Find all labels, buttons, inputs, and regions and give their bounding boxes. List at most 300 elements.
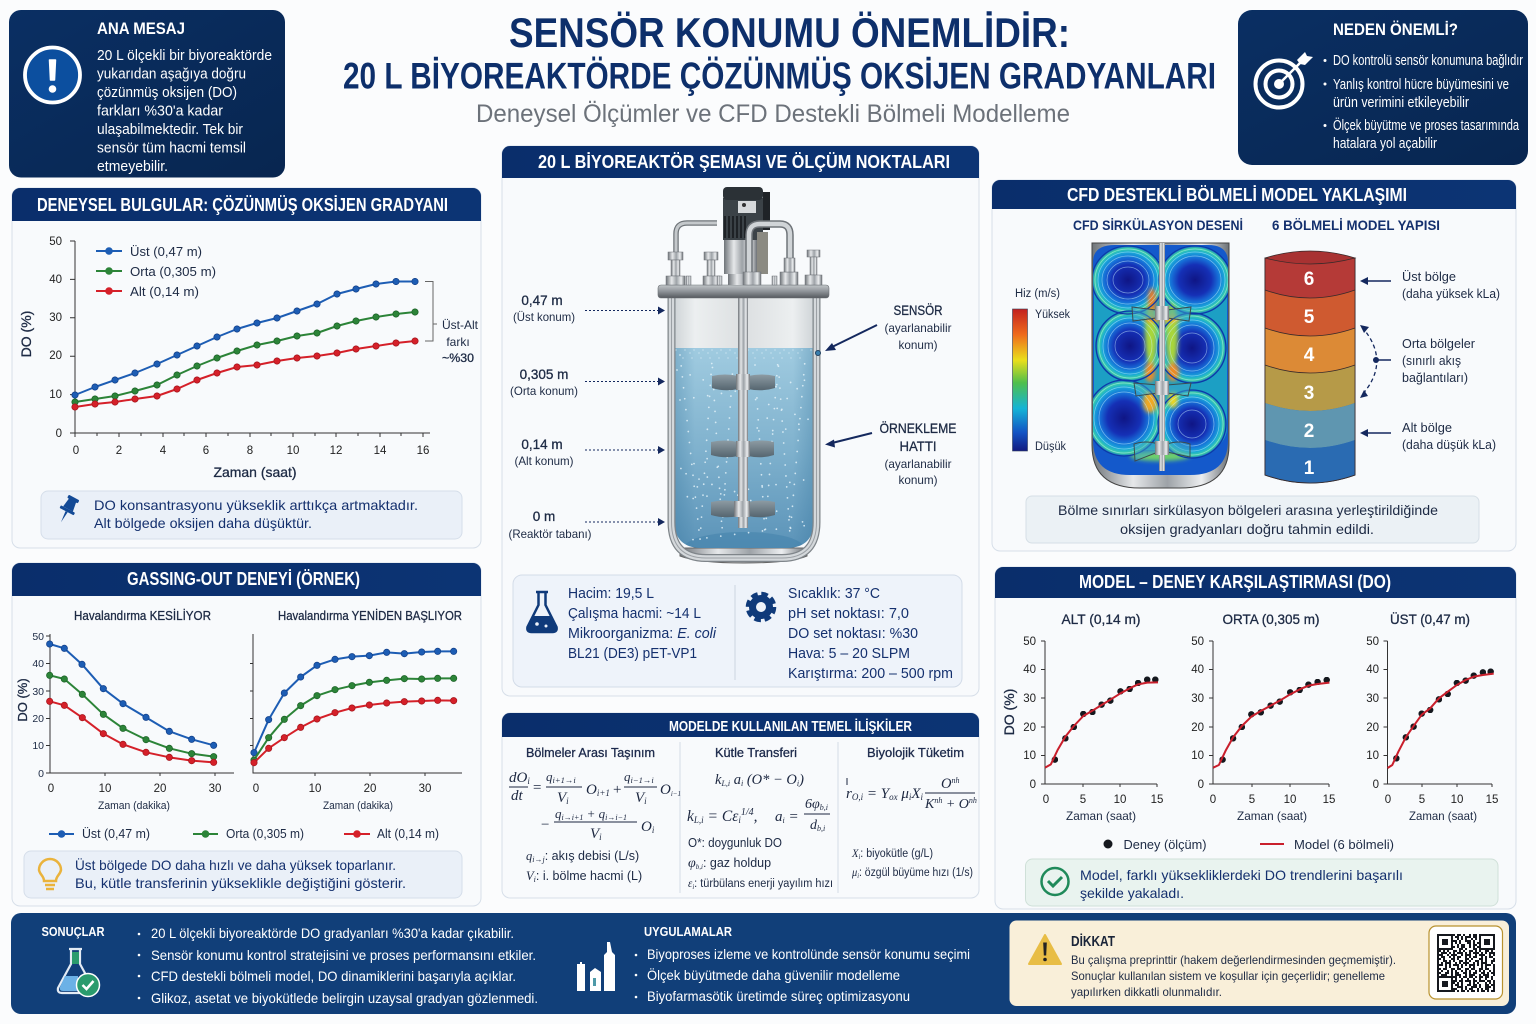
chart: orta: Zaman (saat) — [1237, 809, 1307, 823]
line chart: DO gradient: 8 — [247, 445, 253, 457]
formula: biyolojik tüketim: i — [921, 792, 924, 802]
formula: kütle transferi: b,i — [817, 824, 825, 833]
heading: model deney: MODEL – DENEY KARŞILAŞTIRMASI (DO) — [1079, 572, 1391, 592]
chart: üst: 0 — [1385, 794, 1391, 806]
label: örnekleme hattı: konum) — [898, 473, 938, 487]
legend: Orta (0,305 m) — [130, 264, 216, 279]
chart: orta: 40 — [1191, 664, 1204, 676]
panel: biyoreaktör şeması — [502, 146, 979, 696]
chart: alt: 50 — [1023, 636, 1036, 648]
section: uygulamalar: UYGULAMALAR — [644, 924, 733, 939]
bracket: üst-alt farkı: farkı — [446, 335, 470, 349]
bracket: üst-alt farkı: Üst-Alt — [442, 318, 479, 332]
line chart: DO gradient: 20 — [49, 350, 62, 362]
formula: kütle transferi: L,i — [693, 815, 704, 825]
panel: reaktör özellikleri: Sıcaklık: 37 °C — [788, 586, 880, 602]
label: sensör — [816, 301, 952, 356]
label: örnekleme hattı: (ayarlanabilir — [884, 457, 952, 471]
callout: model başarı — [1026, 859, 1498, 906]
chart: havalandırma kesiliyor: 50 — [32, 631, 44, 643]
formula: kütle transferi — [687, 746, 833, 891]
formula: kütle transferi: k — [687, 808, 694, 825]
legend: velocity scale: Yüksek — [1035, 309, 1070, 321]
impellers — [711, 374, 775, 517]
QR code — [1429, 926, 1502, 999]
formula: kütle transferi: k — [715, 772, 721, 788]
chart: üst: 30 — [1366, 693, 1379, 705]
panel: reaktör özellikleri: Mikroorganizma: E. coli — [568, 626, 717, 642]
formula: kütle transferi: L,i — [720, 779, 730, 788]
formula: biyolojik tüketim: i — [859, 853, 860, 861]
panel: reaktör özellikleri: DO set noktası: %30 — [788, 626, 918, 642]
motor — [723, 187, 770, 285]
chart: havalandırma kesiliyor: Havalandırma KESİLİYOR — [74, 608, 211, 623]
formula: bölmeler arası taşınım: V — [590, 826, 599, 842]
formula: bölmeler arası taşınım: V — [526, 869, 535, 883]
chart: alt: 20 — [1023, 722, 1036, 734]
chart: üst: Zaman (saat) — [1409, 809, 1477, 823]
annotation: alt bölge: (daha düşük kLa) — [1402, 438, 1496, 452]
line chart: DO gradient: 0 — [73, 445, 79, 457]
chart: havalandırma kesiliyor: 0 — [48, 783, 54, 795]
formula: biyolojik tüketim: O,i — [852, 792, 864, 802]
legend: deney model — [1104, 837, 1394, 852]
chart: orta: 50 — [1191, 636, 1204, 648]
chart: üst: 10 — [1451, 794, 1463, 806]
height labels: 0 m — [533, 509, 555, 524]
line chart: DO gradient: DO (%) — [18, 311, 34, 357]
formula: kütle transferi: 1/4 — [741, 807, 754, 818]
formula: biyolojik tüketim: K — [925, 797, 934, 812]
formula: kütle transferi: Kütle Transferi — [715, 746, 797, 760]
chart: alt: 10 — [1114, 794, 1126, 806]
formula: biyolojik tüketim: i — [857, 872, 859, 880]
formula: biyolojik tüketim: = Y — [863, 786, 891, 802]
formula: bölmeler arası taşınım: + — [613, 782, 621, 798]
label: örnekleme hattı: HATTI — [900, 438, 936, 454]
callout: DO yükseklik — [41, 491, 462, 539]
callout: üst bölge toparlanma: Bu, kütle transferinin yükseklikle değiştiğini gösterir. — [75, 875, 406, 891]
chart: havalandırma yeniden başlıyor: Zaman (dakika) — [323, 800, 393, 812]
heading: biyoreaktör şeması: 20 L BİYOREAKTÖR ŞEMASI VE ÖLÇÜM NOKTALARI — [538, 152, 950, 172]
chart: üst: 50 — [1366, 636, 1379, 648]
chart: orta: 15 — [1323, 794, 1335, 806]
title: 20 L BİYOREAKTÖRDE ÇÖZÜNMÜŞ OKSİJEN GRADYANLARI — [343, 56, 1216, 96]
icon: bottles — [577, 942, 615, 991]
text: ana mesaj body: yukarıdan aşağıya doğru — [97, 66, 246, 82]
formula: bölmeler arası taşınım — [509, 746, 681, 884]
chart: orta: 10 — [1284, 794, 1296, 806]
pipes and ports — [676, 223, 790, 274]
chart: alt: 30 — [1023, 693, 1036, 705]
chart: havalandırma kesiliyor: DO (%) — [15, 678, 30, 722]
formula: bölmeler arası taşınım: i — [534, 875, 536, 884]
chart: havalandırma yeniden başlıyor — [250, 608, 462, 812]
text: ana mesaj body — [97, 47, 272, 175]
height labels: 0,47 m — [521, 293, 563, 308]
formula: kütle transferi: = Cε — [704, 808, 739, 825]
formula: biyolojik tüketim: μ — [851, 867, 857, 879]
callout: üst bölge toparlanma: Üst bölgede DO daha hızlı ve daha yüksek toparlanır. — [75, 856, 396, 873]
annotation: alt bölge — [1360, 421, 1496, 452]
panel: neden önemli — [1238, 10, 1528, 165]
chart: havalandırma kesiliyor: 10 — [99, 783, 111, 795]
chart: orta: 10 — [1191, 750, 1204, 762]
formula: bölmeler arası taşınım: i+1→i — [552, 775, 576, 785]
heading: neden önemli: NEDEN ÖNEMLİ? — [1333, 20, 1458, 39]
legend: velocity scale: Düşük — [1035, 441, 1066, 453]
formula: kütle transferi: = — [785, 809, 799, 825]
legend: deney model: Deney (ölçüm) — [1124, 837, 1206, 852]
callout: model başarı: Model, farklı yüksekliklerdeki DO trendlerini başarılı — [1080, 867, 1403, 883]
formula: biyolojik tüketim: i — [909, 792, 912, 802]
chart: alt: Zaman (saat) — [1066, 809, 1136, 823]
formula: kütle transferi: i — [738, 815, 741, 825]
panel: gassing-out — [12, 563, 481, 906]
annotation: alt bölge: Alt bölge — [1402, 421, 1452, 435]
list: uygulamalar: Ölçek büyütmede daha güvenilir modelleme — [647, 966, 900, 983]
formula: kütle transferi: 6φ — [805, 797, 820, 812]
subheading: CFD sirkülasyon: CFD SİRKÜLASYON DESENİ — [1073, 217, 1243, 233]
formula: bölmeler arası taşınım: dt — [511, 788, 524, 804]
height labels: 0,305 m — [520, 367, 568, 382]
bracket: üst-alt farkı: ~%30 — [442, 351, 474, 365]
panel: ana mesaj — [9, 10, 285, 178]
chart: üst: 5 — [1419, 794, 1425, 806]
legend: gassing-out: Alt (0,14 m) — [377, 827, 439, 841]
chart: üst: 40 — [1366, 664, 1379, 676]
annotation: üst bölge: (daha yüksek kLa) — [1402, 287, 1500, 301]
legend: velocity scale — [1012, 288, 1070, 453]
chart: havalandırma kesiliyor: 10 — [32, 740, 44, 752]
chart: havalandırma kesiliyor — [15, 608, 234, 812]
chart: üst — [1366, 610, 1498, 823]
text: ana mesaj body: sensör tüm hacmi temsil — [97, 140, 246, 156]
chart: havalandırma kesiliyor: 0 — [38, 768, 44, 780]
heading: ana mesaj: ANA MESAJ — [97, 19, 185, 38]
chart: üst: 20 — [1366, 722, 1379, 734]
label: sensör: SENSÖR — [894, 301, 942, 318]
formula: biyolojik tüketim: O — [941, 776, 951, 792]
formula: kütle transferi: , — [754, 808, 757, 825]
callout: DO yükseklik: Alt bölgede oksijen daha düşüktür. — [94, 515, 312, 531]
icon: flask with check — [58, 949, 100, 996]
icon: target — [1256, 52, 1313, 108]
formula: bölmeler arası taşınım: i+1 — [597, 788, 610, 798]
panel: temel ilişkiler — [502, 713, 979, 898]
line chart: DO gradient: 12 — [330, 445, 342, 457]
section: sonuçlar: SONUÇLAR — [42, 924, 105, 939]
list: sonuçlar — [138, 925, 538, 1006]
chart: alt: 5 — [1080, 794, 1086, 806]
formula: biyolojik tüketim: nh — [934, 796, 942, 805]
legend: gassing-out: Orta (0,305 m) — [226, 827, 304, 841]
callout: dikkat: yapılırken dikkatli olunmalıdır. — [1071, 985, 1222, 999]
formula: bölmeler arası taşınım: q — [555, 806, 562, 821]
line chart: DO gradient: Zaman (saat) — [214, 464, 296, 480]
chart: orta: 20 — [1191, 722, 1204, 734]
panel: reaktör özellikleri: pH set noktası: 7,0 — [788, 606, 909, 622]
panel: reaktör özellikleri: Hacim: 19,5 L — [568, 586, 654, 602]
chart: havalandırma kesiliyor: 20 — [154, 783, 166, 795]
formula: bölmeler arası taşınım: : akış debisi (L/s) — [545, 849, 639, 863]
chart: havalandırma yeniden başlıyor: 30 — [419, 783, 431, 795]
annotation: orta bölgeler — [1360, 325, 1475, 398]
subtitle: Deneysel Ölçümler ve CFD Destekli Bölmeli Modelleme — [476, 100, 1070, 128]
formula: bölmeler arası taşınım: dO — [509, 770, 527, 786]
text: neden önemli bullets: hatalara yol açabilir — [1333, 136, 1437, 152]
line chart: DO gradient — [18, 236, 479, 480]
formula: bölmeler arası taşınım: i — [644, 796, 647, 806]
chart: havalandırma kesiliyor: 40 — [32, 658, 44, 670]
chart: orta — [1191, 611, 1335, 823]
panel: model deney karşılaştırması — [995, 567, 1516, 909]
formula: bölmeler arası taşınım: i→i−1 — [605, 813, 627, 822]
illustration: 6 compartment cylinder: 3 — [1304, 383, 1314, 404]
height labels: (Reaktör tabanı) — [508, 527, 592, 541]
text: ana mesaj body: 20 L ölçekli bir biyoreaktörde — [97, 47, 272, 64]
illustration: 6 compartment cylinder: 2 — [1304, 421, 1314, 442]
chart: orta: 0 — [1210, 794, 1216, 806]
text: neden önemli bullets — [1324, 53, 1523, 152]
formula: bölmeler arası taşınım: − — [541, 817, 549, 833]
formula: biyolojik tüketim: ox — [889, 792, 898, 802]
legend: gassing-out — [49, 827, 439, 841]
formula: bölmeler arası taşınım: i — [599, 832, 602, 842]
label: sensör: (ayarlanabilir — [884, 321, 952, 335]
chart: alt: 10 — [1023, 750, 1036, 762]
heading: temel ilişkiler: MODELDE KULLANILAN TEMEL İLİŞKİLER — [669, 718, 912, 735]
annotation: orta bölgeler: Orta bölgeler — [1402, 337, 1475, 351]
chart: orta: 30 — [1191, 693, 1204, 705]
list: sonuçlar: 20 L ölçekli biyoreaktörde DO gradyanları %30'a kadar çıkabilir. — [151, 925, 514, 941]
formula: kütle transferi: b,i — [696, 863, 703, 871]
list: uygulamalar — [635, 946, 970, 1004]
panel: deneysel bulgular — [12, 188, 481, 548]
text: ana mesaj body: ulaşabilmektedir. Tek bir — [97, 121, 243, 138]
legend: Üst (0,47 m) — [130, 244, 202, 259]
illustration: 6 compartment cylinder — [1265, 251, 1355, 483]
annotation: orta bölgeler: bağlantıları) — [1402, 371, 1468, 385]
annotation: üst bölge — [1360, 270, 1500, 301]
callout: dikkat: Bu çalışma preprinttir (hakem değerlendirmesinden geçmemiştir). — [1071, 953, 1396, 967]
panel: CFD destekli model — [992, 180, 1516, 551]
chart: havalandırma yeniden başlıyor: Havalandırma YENİDEN BAŞLIYOR — [278, 608, 462, 623]
formula: kütle transferi: a — [730, 772, 741, 788]
height labels: (Orta konum) — [510, 384, 578, 398]
illustration: bioreactor — [658, 187, 829, 564]
formula: kütle transferi: b,i — [820, 803, 828, 812]
formula: biyolojik tüketim: nh — [951, 776, 959, 785]
height labels: (Üst konum) — [513, 310, 575, 324]
icon: gear — [748, 594, 774, 620]
title — [343, 9, 1216, 96]
formula: biyolojik tüketim: X — [851, 848, 859, 860]
height labels: (Alt konum) — [514, 454, 574, 468]
formula: kütle transferi: a — [775, 809, 782, 825]
text: neden önemli bullets: ürün verimini etkileyebilir — [1333, 95, 1469, 111]
panel: reaktör özellikleri: Hava: 5 – 20 SLPM — [788, 646, 910, 662]
line chart: DO gradient: 16 — [417, 445, 429, 457]
annotation: orta bölgeler: (sınırlı akış — [1402, 354, 1461, 368]
callout: dikkat: DİKKAT — [1071, 933, 1115, 950]
list: uygulamalar: Biyoproses izleme ve kontrolünde sensör konumu seçimi — [647, 946, 970, 962]
formula: biyolojik tüketim: nh — [969, 796, 977, 805]
formula: kütle transferi: d — [810, 818, 817, 833]
icon: light bulb — [39, 859, 61, 889]
chart: havalandırma kesiliyor: Zaman (dakika) — [98, 800, 170, 812]
chart: üst: ÜST (0,47 m) — [1390, 610, 1470, 627]
icon: warning — [1029, 935, 1061, 964]
formula: bölmeler arası taşınım: Bölmeler Arası Taşınım — [526, 746, 655, 760]
list: sonuçlar: CFD destekli bölmeli model, DO dinamiklerini başarıyla açıklar. — [151, 968, 516, 984]
formula: bölmeler arası taşınım: i→j — [532, 855, 545, 864]
illustration: 6 compartment cylinder: 1 — [1304, 458, 1315, 479]
height labels — [508, 293, 592, 541]
formula: bölmeler arası taşınım: q — [624, 769, 630, 784]
icon: exclamation — [25, 48, 80, 102]
callout: bölme sınırları: oksijen gradyanları doğru tahmin edildi. — [1120, 521, 1374, 537]
chart: havalandırma yeniden başlıyor: 0 — [253, 783, 259, 795]
line chart: DO gradient: 14 — [374, 445, 387, 457]
formula: biyolojik tüketim: : biyokütle (g/L) — [860, 848, 933, 860]
section: uygulamalar — [577, 924, 970, 1004]
formula: biyolojik tüketim: X — [910, 786, 921, 802]
chart: alt: 0 — [1043, 794, 1049, 806]
callout: bölme sınırları — [1026, 496, 1479, 543]
formula: kütle transferi: i — [782, 816, 785, 825]
chart: orta: 0 — [1198, 779, 1204, 791]
text: ana mesaj body: etmeyebilir. — [97, 158, 168, 175]
formula: kütle transferi: O*: doygunluk DO — [688, 836, 782, 850]
formula: kütle transferi: : gaz holdup — [703, 856, 771, 870]
legend: gassing-out: Üst (0,47 m) — [82, 827, 150, 841]
chart: havalandırma kesiliyor: 30 — [209, 783, 221, 795]
legend — [96, 244, 216, 299]
formula: bölmeler arası taşınım: i→i+1 — [562, 813, 583, 822]
panel: alt şerit — [11, 913, 1516, 1014]
formula: bölmeler arası taşınım: i−1→i — [630, 775, 654, 785]
line chart: DO gradient: 0 — [56, 428, 62, 440]
formula: biyolojik tüketim: r — [846, 786, 852, 802]
formula: bölmeler arası taşınım: O — [641, 819, 652, 835]
arrows: measurement points — [585, 306, 665, 526]
callout: model başarı: şekilde yakaladı. — [1080, 885, 1184, 901]
formula: bölmeler arası taşınım: i — [652, 825, 655, 835]
line chart: DO gradient: 40 — [49, 274, 62, 286]
chart: üst: 10 — [1366, 750, 1379, 762]
line chart: DO gradient: 2 — [116, 445, 122, 457]
formula: kütle transferi: i — [692, 883, 694, 891]
chart: alt: 40 — [1023, 664, 1036, 676]
heading: CFD: CFD DESTEKLİ BÖLMELİ MODEL YAKLAŞIMI — [1067, 185, 1407, 205]
line chart: DO gradient: 4 — [160, 445, 167, 457]
heading: deneysel bulgular: DENEYSEL BULGULAR: ÇÖZÜNMÜŞ OKSİJEN GRADYANI — [37, 195, 448, 215]
chart: havalandırma kesiliyor: 30 — [32, 686, 44, 698]
callout: bölme sınırları: Bölme sınırları sirkülasyon bölgeleri arasına yerleştirildiğinde — [1058, 502, 1438, 518]
formula: biyolojik tüketim: : özgül büyüme hızı (1/s) — [859, 867, 973, 879]
chart: havalandırma kesiliyor: 20 — [32, 713, 44, 725]
formula: biyolojik tüketim — [846, 746, 977, 880]
chart: üst: 15 — [1486, 794, 1498, 806]
subheading: 6 bölmeli: 6 BÖLMELİ MODEL YAPISI — [1272, 217, 1440, 233]
chart: orta: 5 — [1249, 794, 1255, 806]
callout: dikkat: Sonuçlar kullanılan sistem ve koşullar için geçerlidir; genelleme — [1071, 969, 1385, 983]
illustration: CFD velocity field — [1087, 243, 1231, 488]
icon: flask — [527, 592, 557, 632]
panel: reaktör özellikleri: Karıştırma: 200 – 500 rpm — [788, 666, 953, 682]
line chart: DO gradient: 50 — [49, 236, 62, 248]
line chart: DO gradient: 6 — [203, 445, 209, 457]
formula: bölmeler arası taşınım: O — [660, 782, 671, 798]
formula: bölmeler arası taşınım: : i. bölme hacmi (L) — [536, 869, 642, 883]
label: sensör: konum) — [898, 338, 938, 352]
formula: bölmeler arası taşınım: V — [635, 790, 644, 806]
chart: alt — [1023, 611, 1163, 823]
label: örnekleme hattı: ÖRNEKLEME — [880, 419, 956, 436]
chart: üst: 0 — [1373, 779, 1379, 791]
formula: bölmeler arası taşınım: i — [527, 776, 530, 786]
formula: kütle transferi: (O* − O — [743, 772, 797, 788]
formula: kütle transferi: i — [797, 779, 799, 788]
callout: DO yükseklik: DO konsantrasyonu yükseklik arttıkça artmaktadır. — [94, 497, 418, 513]
formula: bölmeler arası taşınım: O — [586, 782, 597, 798]
formula: biyolojik tüketim: μ — [898, 786, 909, 802]
list: sonuçlar: Glikoz, asetat ve biyokütlede belirgin uzaysal gradyan gözlenmedi. — [151, 990, 538, 1006]
annotation: üst bölge: Üst bölge — [1402, 270, 1456, 284]
formula: bölmeler arası taşınım: i−1 — [671, 790, 681, 798]
bracket: üst-alt farkı — [425, 282, 479, 365]
formula: bölmeler arası taşınım: i — [566, 796, 569, 806]
formula: bölmeler arası taşınım: V — [557, 790, 566, 806]
formula: biyolojik tüketim: Biyolojik Tüketim — [867, 746, 964, 760]
legend: velocity scale: Hiz (m/s) — [1015, 288, 1060, 300]
panel: reaktör özellikleri: Çalışma hacmi: ~14 L — [568, 606, 701, 622]
illustration: 6 compartment cylinder: 4 — [1304, 345, 1315, 366]
panel: model deney karşılaştırması: DO (%) — [1001, 689, 1017, 735]
callout: dikkat — [1010, 920, 1509, 1006]
chart: havalandırma yeniden başlıyor: 20 — [364, 783, 376, 795]
chart: havalandırma yeniden başlıyor: 10 — [309, 783, 321, 795]
formula: kütle transferi: φ — [688, 856, 696, 871]
formula: kütle transferi: i — [741, 779, 743, 788]
heading: gassing-out: GASSING-OUT DENEYİ (ÖRNEK) — [127, 569, 360, 589]
formula: biyolojik tüketim: + O — [942, 797, 969, 812]
chart: alt: ALT (0,14 m) — [1062, 611, 1140, 627]
formula: kütle transferi: ) — [798, 772, 804, 788]
text: ana mesaj body: farkları %30'a kadar — [97, 102, 223, 120]
line chart: DO gradient: 10 — [287, 445, 299, 457]
line chart: DO gradient: 10 — [49, 389, 62, 401]
legend: deney model: Model (6 bölmeli) — [1294, 837, 1394, 852]
list: sonuçlar: Sensör konumu kontrol stratejisini ve proses performansını etkiler. — [151, 947, 536, 963]
formula: bölmeler arası taşınım: q — [526, 849, 532, 863]
formula: bölmeler arası taşınım: q — [546, 769, 552, 784]
panel: reaktör özellikleri: BL21 (DE3) pET-VP1 — [568, 646, 697, 662]
chart: alt: 15 — [1151, 794, 1163, 806]
chart: orta: ORTA (0,305 m) — [1222, 611, 1320, 627]
icon: pin — [54, 494, 81, 526]
illustration: 6 compartment cylinder: 5 — [1304, 307, 1315, 328]
formula: kütle transferi: ε — [688, 878, 693, 890]
list: uygulamalar: Biyofarmasötik üretimde süreç optimizasyonu — [647, 988, 910, 1004]
illustration: 6 compartment cylinder: 6 — [1304, 269, 1314, 290]
chart: alt: 0 — [1030, 779, 1036, 791]
formula: kütle transferi: : türbülans enerji yayılım hızı — [694, 878, 833, 890]
formula: bölmeler arası taşınım: + q — [583, 806, 606, 821]
panel: reaktör özellikleri — [513, 575, 962, 687]
section: sonuçlar — [42, 924, 538, 1006]
